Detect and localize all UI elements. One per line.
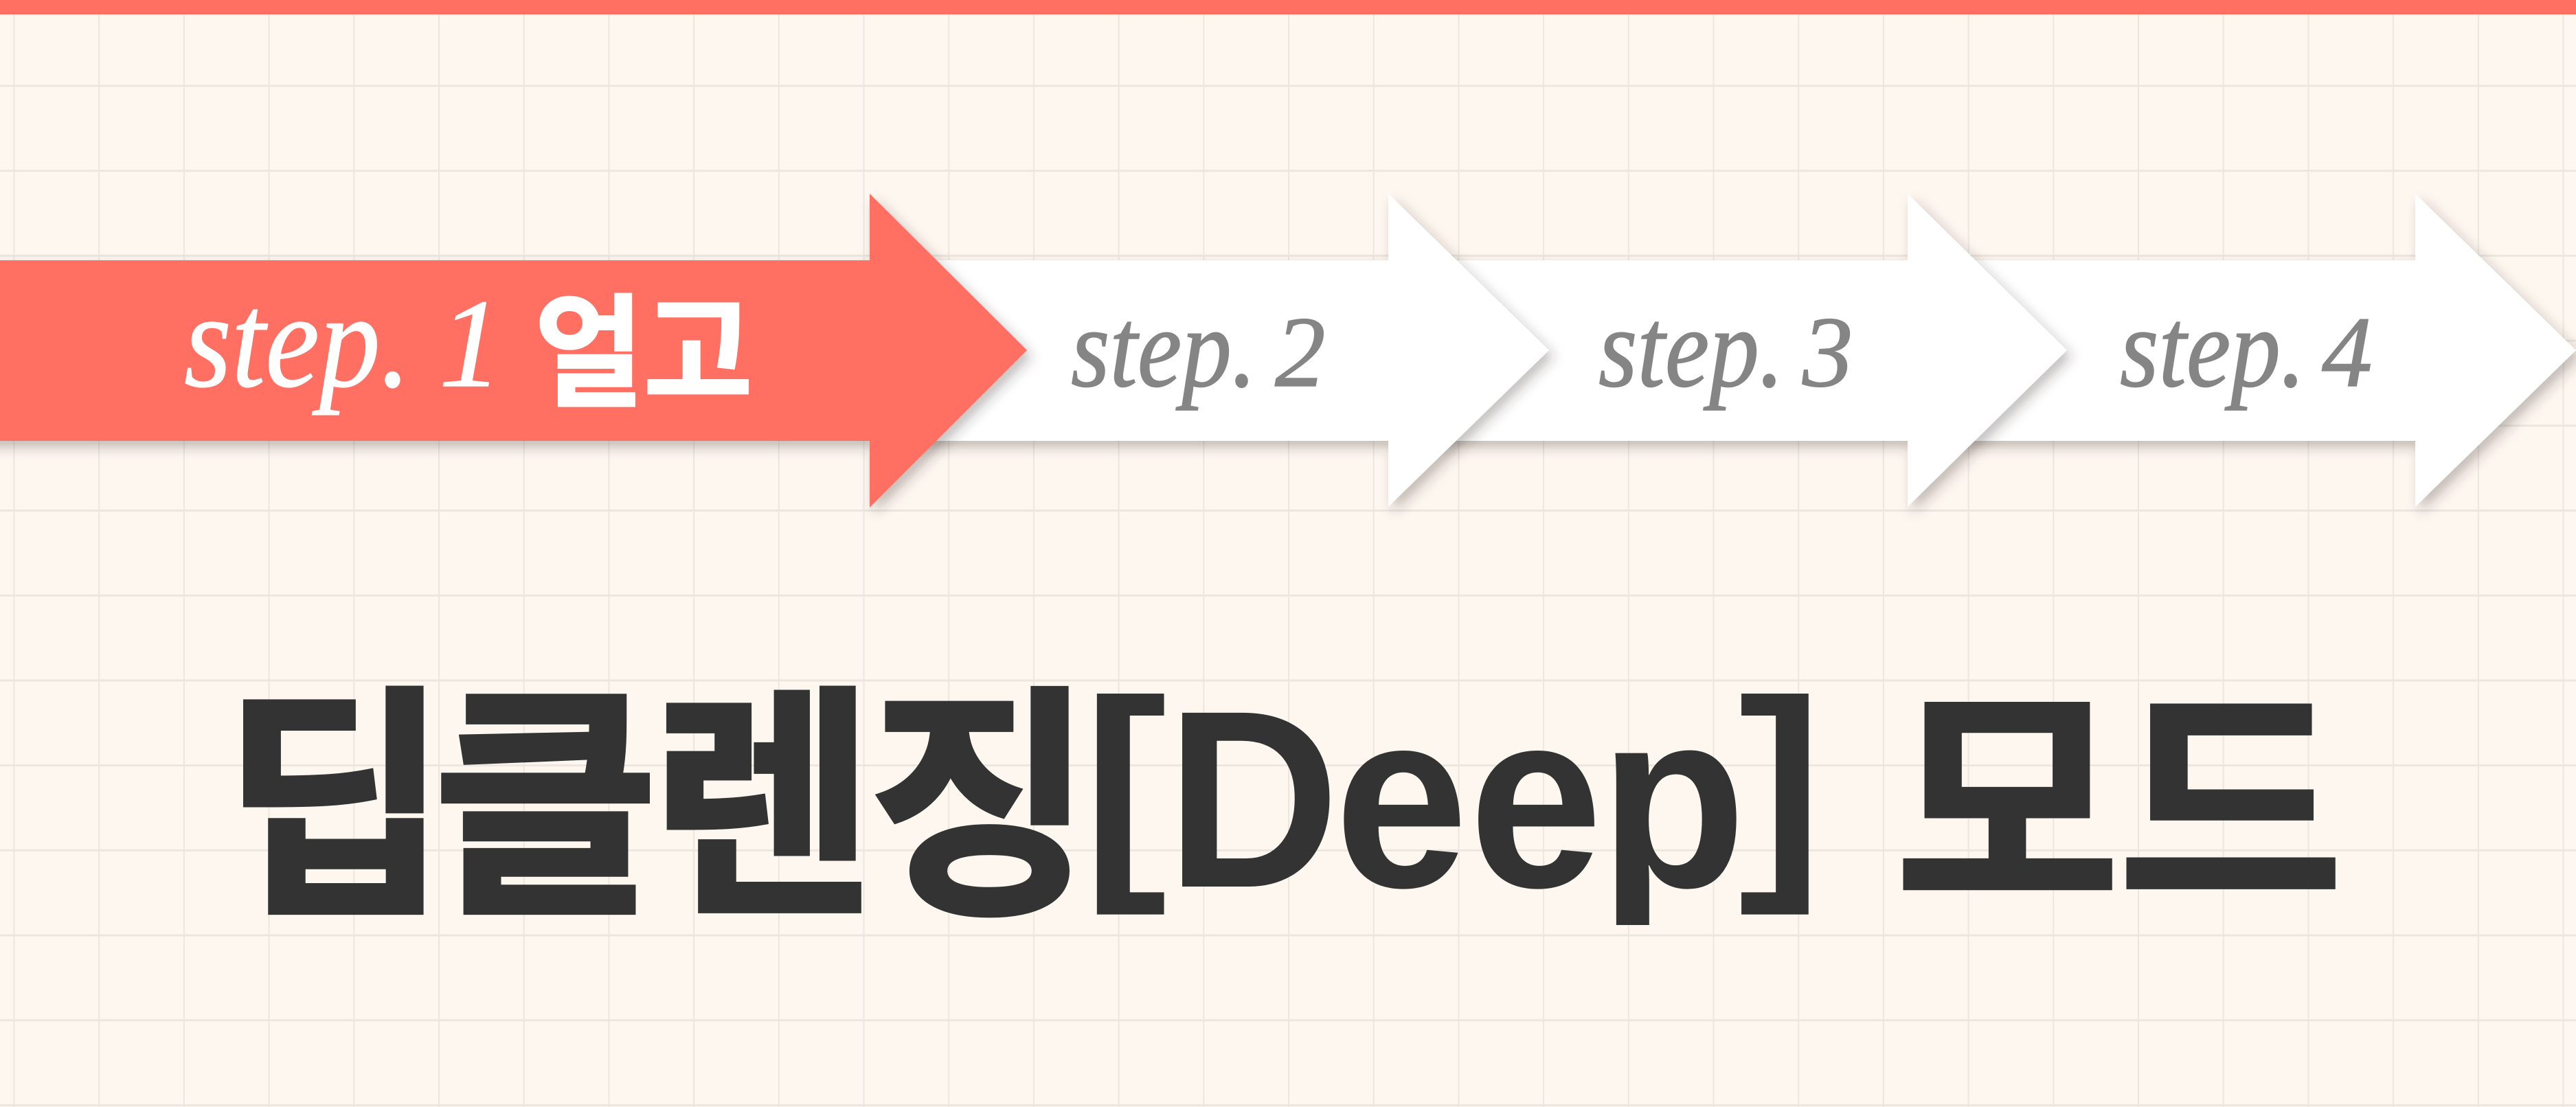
title: Deep <box>1166 659 1746 941</box>
label: step 2: 2 <box>1275 296 1326 408</box>
arrow: step 4 <box>1937 194 2576 507</box>
label: step 4: step. <box>2120 285 2305 411</box>
title: 모드 <box>1896 672 2342 944</box>
label: step 4: 4 <box>2322 296 2373 408</box>
top accent bar <box>0 0 2576 14</box>
label: step 1 <box>184 265 753 423</box>
label: step 1: 1 <box>439 273 502 413</box>
label: step 1: 얼고 <box>534 286 753 423</box>
arrow: step 3 <box>1429 194 2067 507</box>
label: step 2: step. <box>1071 285 1256 411</box>
title: 딥클렌징 <box>223 673 1093 945</box>
label: step 3: 3 <box>1802 296 1853 408</box>
label: step 1: step. <box>184 265 411 415</box>
label: step 3: step. <box>1598 285 1784 411</box>
title: ] <box>1739 651 1822 917</box>
title: [ <box>1083 651 1167 917</box>
title <box>243 685 2336 925</box>
arrow: step 1 active <box>0 194 1027 507</box>
arrow: step 2 <box>893 194 1549 507</box>
